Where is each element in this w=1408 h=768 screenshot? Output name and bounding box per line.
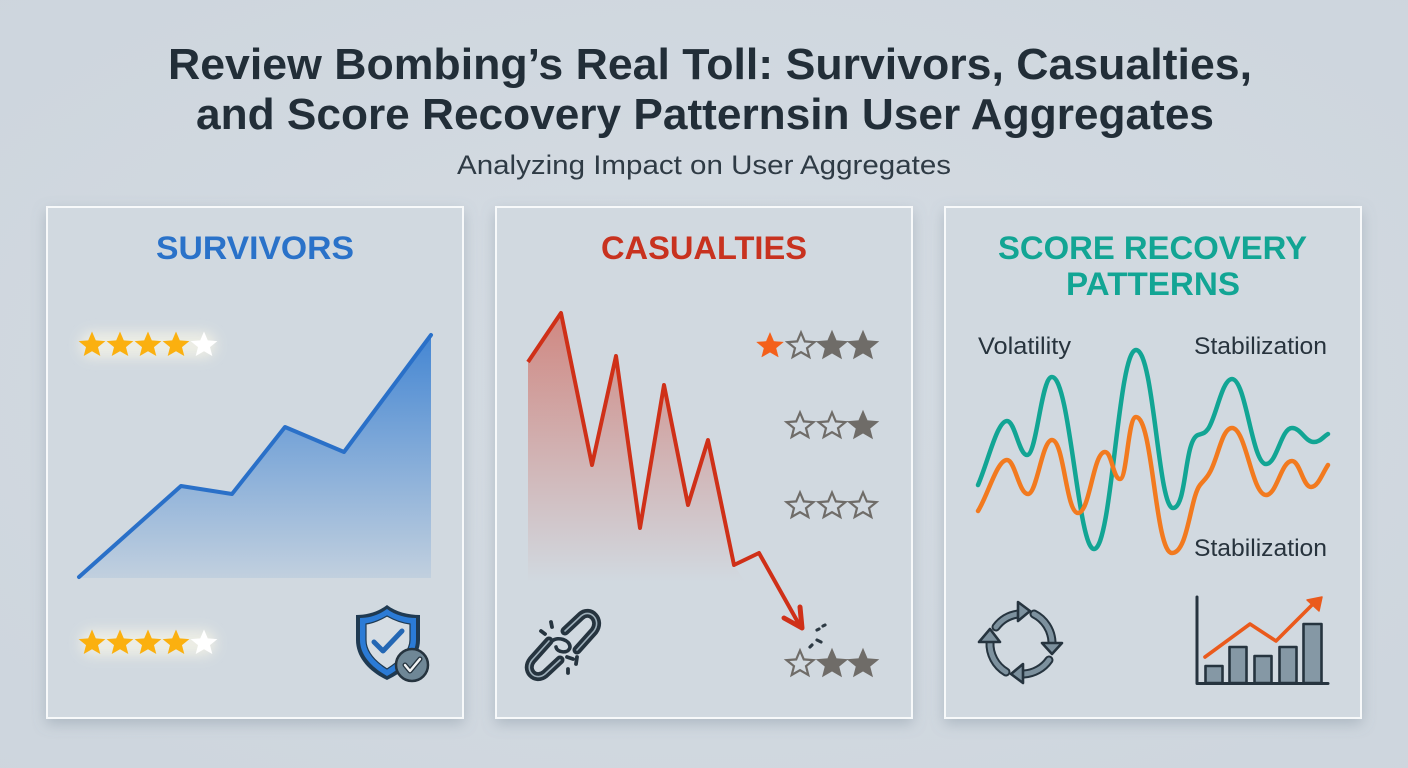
panel: casualties <box>496 207 912 718</box>
line chart: recovery waves <box>978 350 1328 553</box>
debris dots <box>810 625 825 647</box>
icon: broken chain <box>529 613 597 677</box>
label: stabilization top: Stabilization <box>1194 333 1327 360</box>
panel: score recovery patterns <box>945 207 1361 718</box>
title: Review Bombing’s Real Toll: Survivors, Casualties, <box>168 40 1252 89</box>
star rating: row 3 <box>787 492 876 517</box>
icon: bar chart with rising arrow <box>1197 597 1328 684</box>
heading: score recovery patterns: PATTERNS <box>1066 266 1240 302</box>
panel: survivors <box>47 207 463 718</box>
label: volatility: Volatility <box>978 333 1071 360</box>
title: and Score Recovery Patternsin User Aggregates <box>196 90 1214 139</box>
title <box>168 40 1252 139</box>
star rating: top <box>79 332 217 358</box>
area chart: falling score <box>528 313 802 628</box>
heading: score recovery patterns: SCORE RECOVERY <box>998 230 1307 266</box>
icon: recovery cycle <box>979 602 1062 683</box>
star rating: row 1 <box>757 332 876 357</box>
star rating: row 2 <box>787 412 876 437</box>
heading: score recovery patterns <box>998 230 1307 302</box>
subtitle: Analyzing Impact on User Aggregates <box>457 150 951 180</box>
heading: casualties: CASUALTIES <box>601 230 807 266</box>
area chart: rising score <box>79 335 431 578</box>
label: stabilization bottom: Stabilization <box>1194 535 1327 562</box>
heading: survivors: SURVIVORS <box>156 230 354 266</box>
arrow: decline <box>784 607 802 628</box>
star rating: row 4 <box>787 650 876 675</box>
star rating: bottom <box>79 630 217 656</box>
icon: shield with check <box>356 605 428 681</box>
